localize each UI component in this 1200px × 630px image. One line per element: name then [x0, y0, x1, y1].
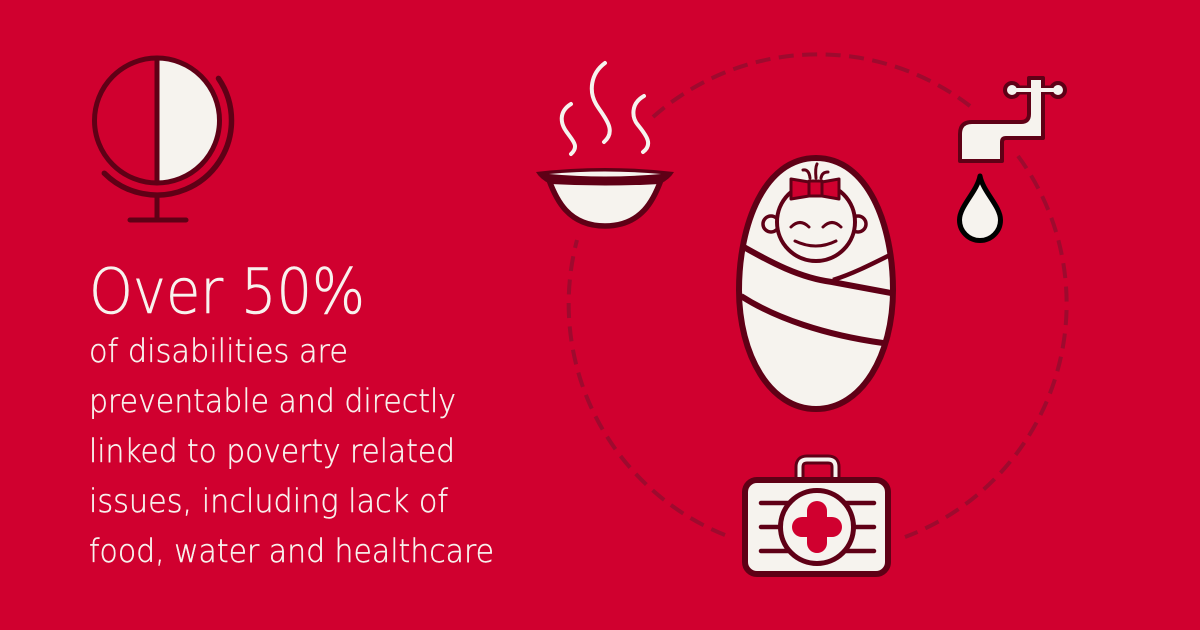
- text block: description: preventable and directly: [89, 382, 456, 420]
- bowl rim: [536, 168, 674, 186]
- swaddle outline: [739, 158, 893, 409]
- text block: description: [89, 332, 494, 570]
- kit handle: [800, 460, 836, 480]
- text block: description: of disabilities are: [89, 332, 348, 370]
- swaddle wraps: [741, 246, 891, 343]
- text block: description: food, water and healthcare: [89, 532, 494, 570]
- icon: first aid kit: [745, 460, 888, 574]
- tap handle: [1005, 83, 1065, 97]
- baby face: [791, 164, 841, 246]
- hair bow: [791, 179, 839, 199]
- text block: description: issues, including lack of: [89, 482, 449, 520]
- icon: swaddled baby: [739, 158, 893, 409]
- baby head: [777, 183, 855, 261]
- tap spout: [960, 78, 1043, 161]
- kit lines: [761, 503, 874, 551]
- icon: globe: [94, 58, 232, 220]
- heading: Over 50%: Over 50%: [89, 255, 365, 328]
- baby ears: [763, 216, 866, 232]
- dashed circle linking the icons: [569, 54, 1067, 537]
- icon: steaming bowl: [536, 63, 674, 226]
- steam: [562, 63, 648, 154]
- kit case: [745, 480, 888, 574]
- red cross: [802, 511, 832, 543]
- text block: description: linked to poverty related: [89, 432, 455, 470]
- icon: water drop: [960, 176, 1000, 240]
- bowl body: [549, 180, 661, 226]
- kit medallion: [780, 490, 854, 564]
- icon: tap: [960, 78, 1065, 161]
